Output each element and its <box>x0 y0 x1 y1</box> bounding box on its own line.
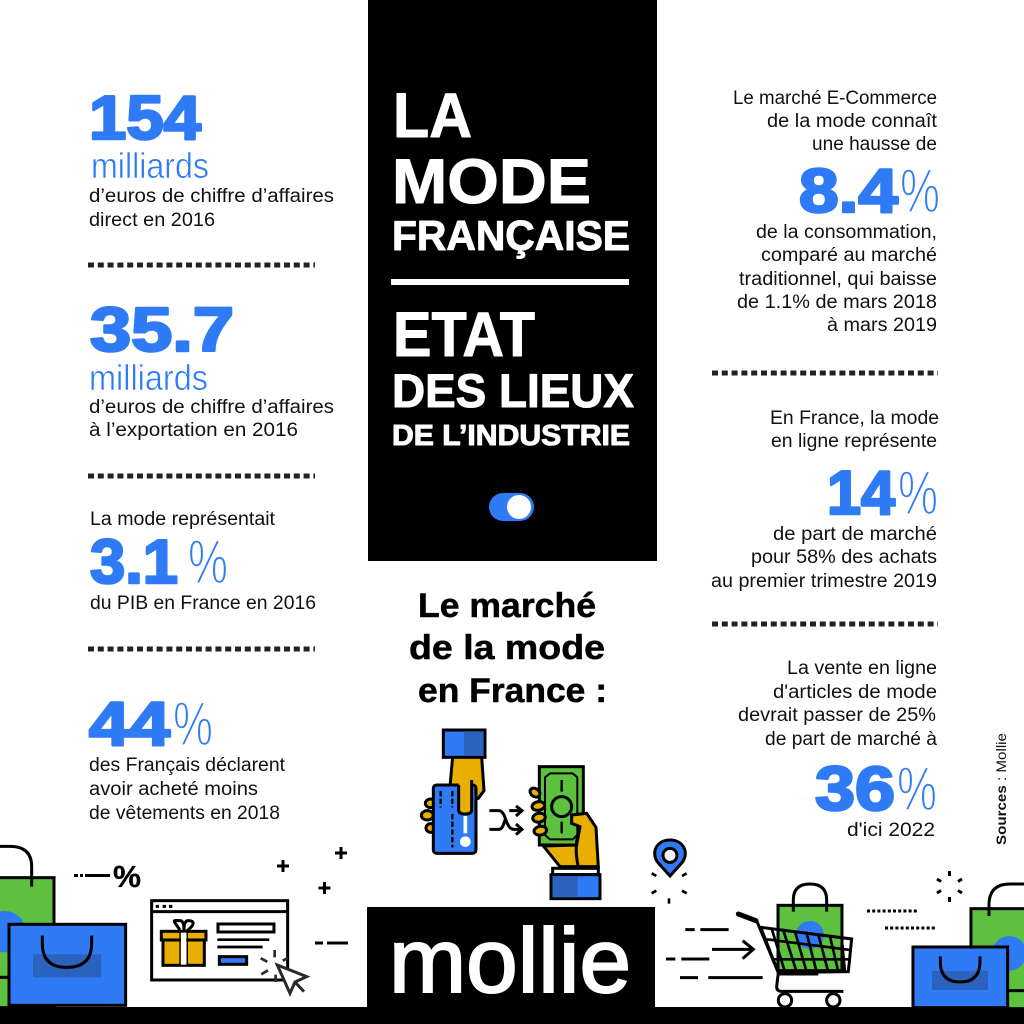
stat: 154 milliards: d’euros de chiffre d’affaires <box>89 186 334 207</box>
stat: 8.4% e-commerce growth: de la mode connaît <box>767 111 938 132</box>
stat: 14% online market share: pour 58% des achats <box>751 547 937 568</box>
source credit: Sources : Mollie <box>994 733 1009 845</box>
stat: 8.4% e-commerce growth: traditionnel, qui baisse <box>739 269 937 290</box>
stat: 14% online market share: de part de marché <box>773 524 937 545</box>
icon: location pin <box>652 840 687 904</box>
stat: 154 milliards <box>89 84 334 231</box>
panel: mollie logo: mollie <box>389 911 631 1012</box>
stat: 3.1% of GDP: % <box>188 528 228 597</box>
stat: 8.4% e-commerce growth: de 1.1% de mars 2018 <box>737 292 937 313</box>
stat: 8.4% e-commerce growth: de la consommation, <box>756 222 937 243</box>
stat: 36% forecast: devrait passer de 25% <box>738 705 936 726</box>
stat: 3.1% of GDP: du PIB en France en 2016 <box>90 593 316 614</box>
stat: 35.7 milliards: milliards <box>89 357 208 398</box>
stat: 154 milliards: direct en 2016 <box>89 210 215 231</box>
stat: 14% online market share <box>711 408 939 592</box>
stat: 8.4% e-commerce growth: une hausse de <box>812 134 937 155</box>
heading: market in France: en France : <box>418 672 607 710</box>
icon: card and cash exchange <box>421 730 600 899</box>
stat: 14% online market share: % <box>898 459 938 528</box>
panel: title block: DE L’INDUSTRIE <box>392 420 630 452</box>
stat: 14% online market share: En France, la mode <box>770 408 939 429</box>
stat: 44% bought fewer clothes: avoir acheté moins <box>89 779 258 800</box>
stat: 14% online market share: en ligne représente <box>771 431 937 452</box>
icons: left shopping bags <box>0 846 126 1008</box>
stat: 3.1% of GDP: La mode représentait <box>90 509 276 530</box>
icon: shopping cart with bag <box>738 884 852 1007</box>
icon: speed lines and arrow <box>666 930 763 978</box>
heading: market in France: Le marché <box>418 587 596 625</box>
stat: 35.7 milliards: 35.7 <box>90 296 234 365</box>
stat: 36% forecast: de part de marché à <box>765 729 937 750</box>
icons: plus signs <box>277 847 347 894</box>
stat: 44% bought fewer clothes <box>89 690 286 824</box>
heading: market in France: de la mode <box>409 629 605 667</box>
stat: 44% bought fewer clothes: % <box>173 690 213 759</box>
panel: title block: ETAT <box>393 300 535 370</box>
panel: title block: FRANÇAISE <box>392 212 630 259</box>
stat: 3.1% of GDP: 3.1 <box>90 528 178 597</box>
icon: browser with gift <box>152 901 307 993</box>
stat: 8.4% e-commerce growth <box>733 88 940 336</box>
stat: 35.7 milliards <box>89 296 334 441</box>
icon: toggle <box>489 493 534 521</box>
stat: 36% forecast: d'ici 2022 <box>847 820 935 841</box>
stat: 35.7 milliards: à l’exportation en 2016 <box>89 420 298 441</box>
stat: 154 milliards: milliards <box>91 145 209 186</box>
stat: 35.7 milliards: d’euros de chiffre d’affaires <box>89 397 334 418</box>
decorative dotted lines <box>867 911 936 928</box>
icon: percent tag with dashes: % <box>113 859 141 894</box>
panel: title block: LA <box>393 81 472 151</box>
stat: 36% forecast: d'articles de mode <box>773 682 937 703</box>
stat: 36% forecast: % <box>897 755 937 824</box>
decorative burst <box>937 871 962 902</box>
icons: right shopping bags <box>913 884 1024 1009</box>
bottom bar <box>0 1007 1024 1024</box>
stat: 8.4% e-commerce growth: Le marché E-Commerce <box>733 88 937 109</box>
stat: 154 milliards: 154 <box>89 84 202 153</box>
stat: 36% forecast: 36 <box>815 755 895 824</box>
stat: 36% forecast: La vente en ligne <box>787 658 937 679</box>
stat: 3.1% of GDP <box>90 509 316 614</box>
stat: 8.4% e-commerce growth: comparé au marché <box>761 245 937 266</box>
icon: percent tag with dashes <box>74 859 141 894</box>
stat: 8.4% e-commerce growth: % <box>900 157 940 226</box>
panel: title block: DES LIEUX <box>392 364 634 417</box>
panel: title block <box>368 0 657 561</box>
decorative dashes <box>315 942 348 944</box>
stat: 14% online market share: au premier trimestre 2019 <box>711 571 937 592</box>
stat: 8.4% e-commerce growth: 8.4 <box>799 157 899 226</box>
heading: market in France <box>409 587 607 710</box>
stat: 14% online market share: 14 <box>827 459 896 528</box>
stat: 44% bought fewer clothes: de vêtements en 2018 <box>89 803 280 824</box>
stat: 44% bought fewer clothes: 44 <box>89 690 171 759</box>
stat: 8.4% e-commerce growth: à mars 2019 <box>827 315 937 336</box>
panel: title block: MODE <box>392 147 591 217</box>
stat: 36% forecast <box>738 658 937 841</box>
stat: 44% bought fewer clothes: des Français déclarent <box>89 755 286 776</box>
